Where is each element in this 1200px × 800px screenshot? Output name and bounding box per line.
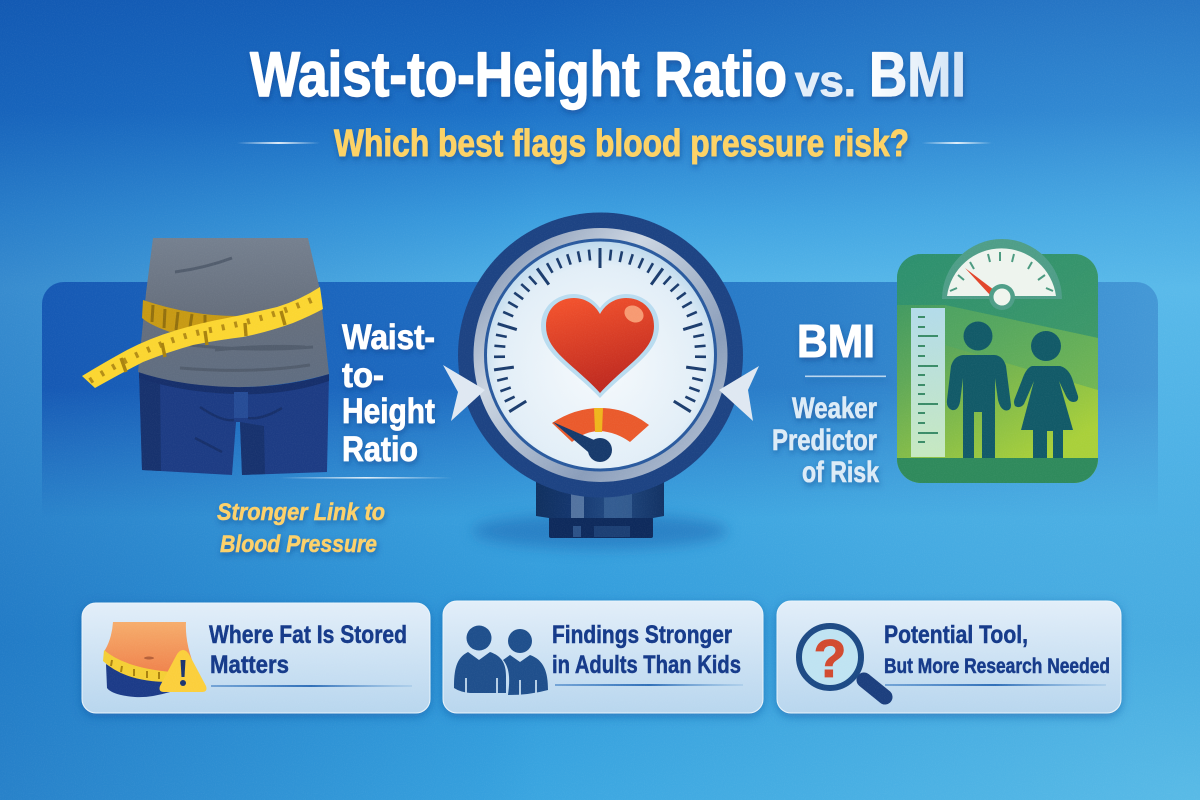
illustration: BMI scale xyxy=(897,239,1098,483)
icon: magnifier with question mark xyxy=(799,626,885,697)
gauge with heart xyxy=(458,212,743,549)
text: where fat is stored: Where Fat Is Stored xyxy=(209,621,407,649)
arrow: right pointer xyxy=(719,366,759,421)
label: weaker predictor: of Risk xyxy=(802,456,879,489)
text: where fat is stored: Matters xyxy=(210,651,289,679)
mini risk arc xyxy=(552,408,649,442)
callout: stronger link: Blood Pressure xyxy=(220,531,377,558)
icon: magnifier with question mark: ? xyxy=(814,629,846,689)
gauge base xyxy=(536,478,664,538)
shirt xyxy=(138,238,329,387)
card: where fat is stored xyxy=(82,603,430,713)
text: where fat is stored xyxy=(209,621,407,679)
label: Waist-to-Height Ratio: to- xyxy=(342,356,384,395)
label: Waist-to-Height Ratio: Height xyxy=(342,392,435,431)
title: vs. xyxy=(795,57,856,106)
label: Waist-to-Height Ratio: Ratio xyxy=(342,430,418,469)
icon: two people xyxy=(454,626,548,695)
illustration: waist with measuring tape xyxy=(82,238,329,475)
callout: stronger link xyxy=(217,499,385,558)
text: findings: in Adults Than Kids xyxy=(552,651,741,679)
label: weaker predictor: Weaker xyxy=(792,392,877,425)
icon: belly with warning xyxy=(103,622,206,697)
text: potential tool: But More Research Needed xyxy=(884,655,1110,678)
card: more research xyxy=(777,601,1121,713)
scale dial xyxy=(942,239,1062,310)
label: Waist-to-Height Ratio xyxy=(342,318,435,469)
panel: comparison band xyxy=(42,282,1158,498)
label: weaker predictor: Predictor xyxy=(772,424,877,457)
tape back xyxy=(142,300,237,332)
label: Waist-to-Height Ratio: Waist- xyxy=(342,318,435,357)
icon: woman xyxy=(1014,331,1078,458)
title: Waist-to-Height Ratio xyxy=(250,40,787,110)
shorts xyxy=(139,370,329,475)
gauge rim xyxy=(458,212,743,498)
height ruler xyxy=(911,308,945,457)
arrow: left pointer xyxy=(443,365,485,421)
callout: stronger link: Stronger Link to xyxy=(217,499,385,526)
gauge ticks xyxy=(494,248,706,412)
text: findings: Findings Stronger xyxy=(552,621,732,649)
text: findings xyxy=(552,621,741,679)
text: potential tool: Potential Tool, xyxy=(884,621,1028,649)
tape front xyxy=(82,287,323,388)
card: adults vs kids xyxy=(443,601,763,713)
icon: man xyxy=(947,322,1011,458)
label: weaker predictor xyxy=(772,392,879,489)
subtitle: Which best flags blood pressure risk? xyxy=(334,123,909,165)
needle xyxy=(553,422,612,462)
title: BMI xyxy=(869,40,966,110)
icon: heart xyxy=(541,294,659,398)
label: BMI: BMI xyxy=(797,315,875,367)
text: potential tool xyxy=(884,621,1110,678)
